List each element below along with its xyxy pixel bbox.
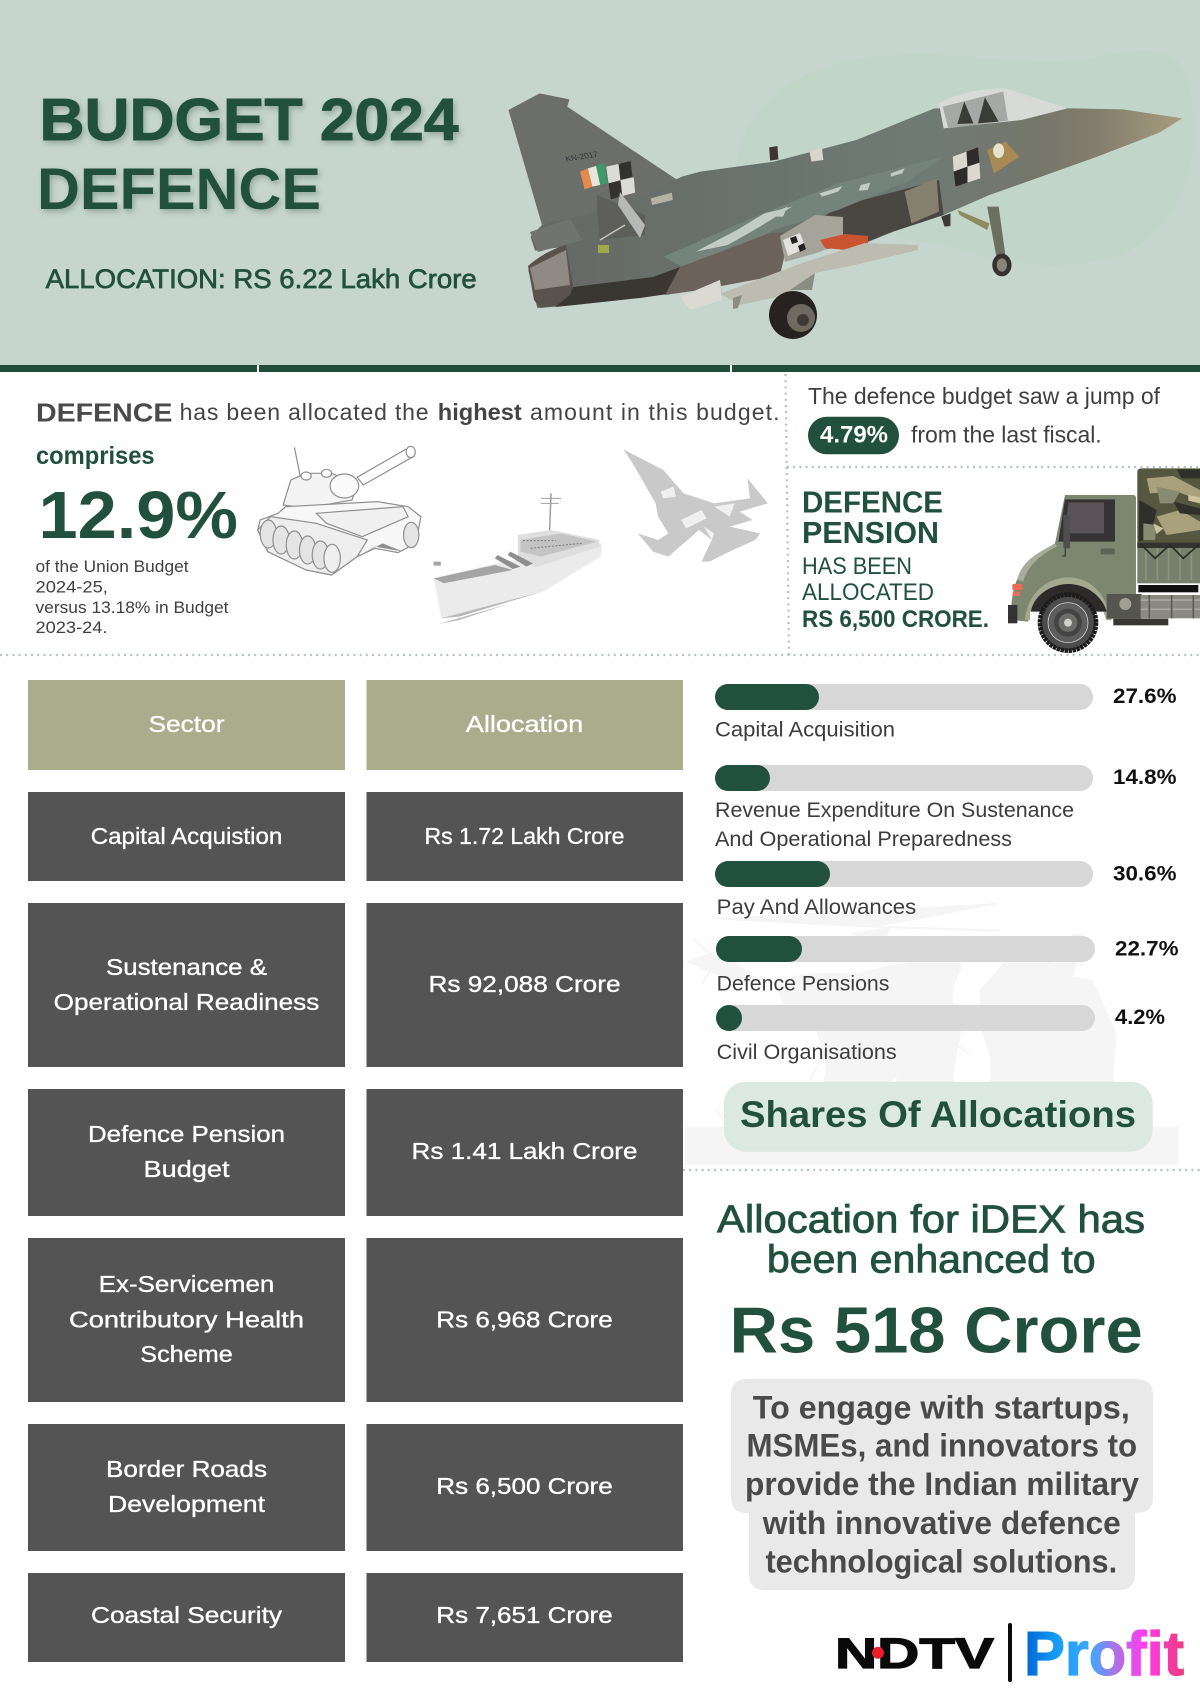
- chart title: shares of allocations: Shares Of Allocations: [740, 1093, 1136, 1135]
- bar chart: shares of allocations: [715, 684, 1178, 1064]
- heading: budget 2024 defence: DEFENCE: [37, 157, 321, 222]
- table row: border roads development: Border Roads: [106, 1456, 267, 1482]
- table row: defence pension budget: [28, 1089, 683, 1216]
- table header row: Sector: [148, 711, 225, 737]
- illustration: fighter jet: KN-2017: [564, 150, 599, 164]
- bar labels: Defence Pensions: [717, 973, 889, 996]
- text block: defence pension: [802, 485, 989, 633]
- table row: border roads development: Development: [108, 1491, 266, 1517]
- text block: 4.79 percent jump: The defence budget saw a jump of: [808, 383, 1161, 409]
- table row: ex-servicemen contributory health scheme: Ex-Servicemen: [99, 1271, 274, 1297]
- table row: sustenance and operational readiness: Operational Readiness: [54, 989, 319, 1015]
- table row: ex-servicemen contributory health scheme: [28, 1238, 683, 1402]
- chart title: shares of allocations: [724, 1082, 1153, 1152]
- bar labels: Revenue Expenditure On Sustenance: [715, 799, 1074, 822]
- text block: defence pension: RS 6,500 CRORE.: [802, 606, 989, 633]
- allocation subtitle: ALLOCATION: RS 6.22 Lakh Crore: [46, 264, 477, 294]
- bar percentages: 27.6%: [1113, 684, 1176, 708]
- stat: 12.9 percent of union budget: 2023-24.: [36, 619, 108, 637]
- table row: coastal security: Coastal Security: [91, 1602, 282, 1628]
- text block: defence highest allocation: has been allocated the: [180, 399, 429, 425]
- text block: defence highest allocation: amount in this budget.: [530, 399, 780, 425]
- callout: iDEX purpose: technological solutions.: [765, 1544, 1117, 1580]
- bar: civil organisations 4.2 percent: [716, 1005, 1095, 1031]
- bar labels: And Operational Preparedness: [715, 828, 1012, 851]
- callout: iDEX purpose: with innovative defence: [762, 1505, 1121, 1541]
- text block: 4.79 percent jump: 4.79%: [820, 422, 888, 449]
- table header row: [28, 680, 683, 770]
- bar labels: [715, 719, 1074, 1064]
- dotted dividers: [0, 374, 1200, 1170]
- heading: iDEX allocation: been enhanced to: [767, 1239, 1096, 1282]
- table row: coastal security: [28, 1573, 683, 1662]
- icon: tank: [258, 446, 421, 575]
- text block: defence pension: PENSION: [802, 515, 939, 550]
- text block: 4.79 percent jump: [808, 383, 1161, 454]
- table row: border roads development: [28, 1424, 683, 1551]
- heading: budget 2024 defence: [37, 87, 459, 222]
- logo: NDTV Profit: NDTV: [835, 1630, 994, 1678]
- table row: border roads development: Rs 6,500 Crore: [436, 1473, 613, 1499]
- text block: defence highest allocation: [36, 398, 780, 428]
- table row: coastal security: Rs 7,651 Crore: [436, 1602, 613, 1628]
- table row: defence pension budget: Rs 1.41 Lakh Crore: [412, 1138, 638, 1164]
- text block: defence highest allocation: DEFENCE: [36, 398, 172, 428]
- table row: capital acquistion: Rs 1.72 Lakh Crore: [424, 823, 624, 849]
- icon: fighter jet silhouette: [623, 449, 768, 562]
- text block: 4.79 percent jump: from the last fiscal.: [911, 422, 1102, 448]
- bar: revenue expenditure 14.8 percent: [715, 765, 1093, 791]
- heading: iDEX allocation: [717, 1199, 1145, 1282]
- bar percentages: 30.6%: [1113, 862, 1176, 886]
- header panel: [0, 0, 1200, 366]
- callout: iDEX purpose: [731, 1379, 1153, 1590]
- stat: Rs 518 Crore: Rs 518 Crore: [730, 1294, 1143, 1367]
- stat: 12.9 percent of union budget: comprises: [36, 442, 155, 470]
- table row: capital acquistion: [28, 792, 683, 881]
- stat: 12.9 percent of union budget: 12.9%: [38, 478, 238, 553]
- bar percentages: 4.2%: [1115, 1005, 1165, 1029]
- bar: capital acquisition 27.6 percent: [715, 684, 1093, 710]
- bar labels: Civil Organisations: [717, 1041, 897, 1064]
- table row: sustenance and operational readiness: [28, 903, 683, 1067]
- bar percentages: 22.7%: [1115, 937, 1178, 961]
- table row: defence pension budget: Budget: [144, 1156, 230, 1182]
- text block: defence pension: DEFENCE: [802, 485, 943, 520]
- table row: defence pension budget: Defence Pension: [88, 1121, 285, 1147]
- table row: ex-servicemen contributory health scheme: Rs 6,968 Crore: [436, 1306, 613, 1332]
- stat: 12.9 percent of union budget: 2024-25,: [36, 579, 108, 597]
- background silhouette: soldiers and helicopters: [685, 903, 1179, 1165]
- bar labels: Pay And Allowances: [717, 896, 916, 919]
- table row: capital acquistion: Capital Acquistion: [91, 823, 282, 849]
- header divider line: [0, 365, 1200, 372]
- stat: 12.9 percent of union budget: versus 13.18% in Budget: [36, 599, 229, 617]
- heading: budget 2024 defence: BUDGET 2024: [40, 87, 459, 153]
- icon: army truck: [1008, 468, 1200, 651]
- text block: defence pension: ALLOCATED: [802, 579, 934, 606]
- logo: NDTV Profit: Profit: [1024, 1620, 1184, 1689]
- icon: warship: [434, 493, 602, 624]
- table row: sustenance and operational readiness: Sustenance &: [106, 954, 267, 980]
- text block: defence pension: HAS BEEN: [802, 553, 912, 580]
- bar labels: Capital Acquisition: [715, 719, 895, 742]
- table row: sustenance and operational readiness: Rs 92,088 Crore: [428, 971, 620, 997]
- stat: 12.9 percent of union budget: of the Union Budget: [36, 558, 189, 576]
- jet underside detail: [528, 192, 918, 339]
- bar: pay and allowances 30.6 percent: [715, 861, 1093, 887]
- text block: defence highest allocation: highest: [438, 399, 522, 425]
- bar percentages: [1113, 684, 1178, 1029]
- table row: ex-servicemen contributory health scheme: Contributory Health: [69, 1306, 304, 1332]
- illustration: fighter jet: [508, 88, 1182, 339]
- stat: 12.9 percent of union budget: [36, 442, 238, 637]
- bar percentages: 14.8%: [1113, 765, 1176, 789]
- callout: iDEX purpose: To engage with startups,: [753, 1390, 1130, 1426]
- bar: defence pensions 22.7 percent: [716, 936, 1095, 962]
- table header row: Allocation: [466, 711, 583, 737]
- logo: NDTV Profit: [835, 1620, 1184, 1689]
- callout: iDEX purpose: MSMEs, and innovators to: [746, 1428, 1137, 1464]
- callout: iDEX purpose: provide the Indian military: [745, 1466, 1139, 1502]
- table row: ex-servicemen contributory health scheme: Scheme: [140, 1341, 233, 1367]
- heading: iDEX allocation: Allocation for iDEX has: [717, 1199, 1145, 1242]
